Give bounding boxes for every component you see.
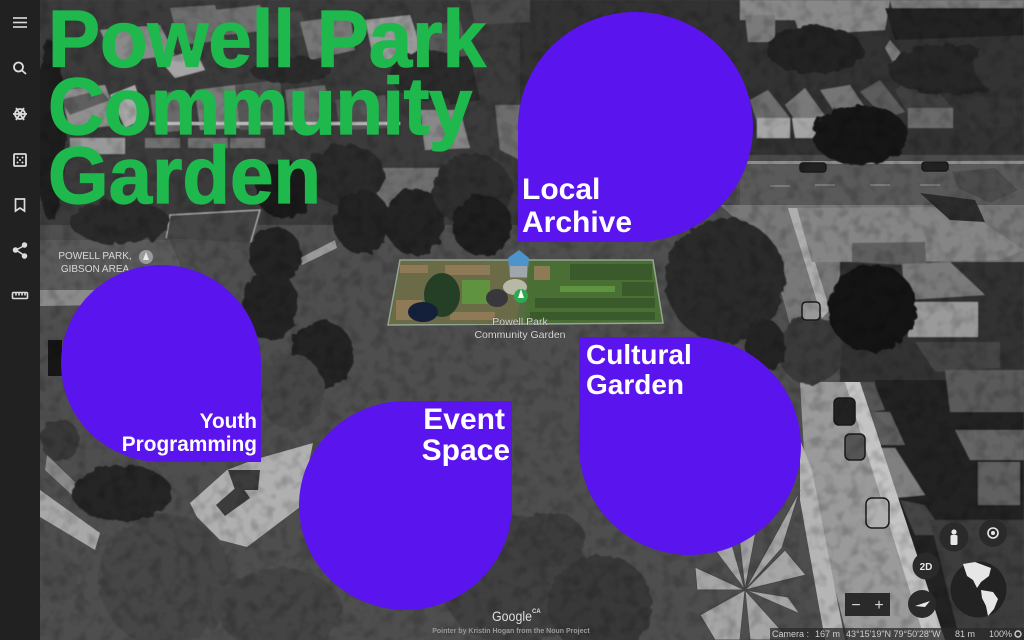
status bar: 81 m: [955, 629, 975, 639]
status bar: [770, 628, 1024, 640]
lower right houses: [840, 242, 1024, 640]
icon: share: [14, 243, 26, 258]
label: local archive: Local: [522, 173, 600, 206]
playground: [190, 443, 313, 547]
garden plot: [388, 250, 663, 325]
label: local archive: [522, 173, 632, 239]
park lawn: [40, 232, 835, 640]
icon: menu: [13, 18, 27, 27]
sidebar: [0, 0, 40, 640]
panel: local archive: [518, 12, 753, 242]
icon: search: [14, 62, 26, 74]
park map label: POWELL PARK,: [58, 251, 132, 262]
street view button: [940, 522, 968, 552]
label: event space: Event: [423, 403, 505, 436]
top right houses: [740, 0, 890, 35]
zoom control: [845, 593, 890, 616]
attribution: Pointer by Kristin Hogan from the Noun Project: [432, 628, 590, 635]
left paths: [40, 290, 110, 306]
apron and curb: [720, 205, 1024, 325]
2D button: [912, 552, 940, 580]
garden map label: Powell Park: [492, 316, 548, 328]
icon: dice: [14, 154, 26, 166]
Google logo: CA: [532, 609, 541, 615]
icon: bookmark: [16, 199, 24, 211]
label: cultural garden: Garden: [586, 369, 684, 400]
cars: [800, 162, 948, 528]
status bar: Camera :: [772, 629, 809, 639]
park map label: GIBSON AREA: [61, 264, 130, 275]
panel: youth programming: [61, 265, 261, 462]
zoom control: +: [874, 597, 884, 614]
garden tree: [424, 273, 460, 317]
houses block top: [40, 0, 1024, 245]
label: youth programming: [122, 410, 257, 456]
status bar: 43°15'19"N 79°50'28"W: [846, 629, 941, 639]
park map pin: [139, 250, 153, 264]
2D button: 2D: [920, 562, 932, 573]
label: local archive: Archive: [522, 206, 632, 239]
title: Community: [48, 61, 472, 152]
blue shed: [508, 250, 529, 278]
panel: cultural garden: [579, 337, 801, 555]
label: cultural garden: Cultural: [586, 339, 692, 370]
side street and sidewalk: [800, 382, 930, 640]
label: event space: [422, 403, 510, 467]
label: event space: Space: [422, 434, 510, 467]
Google logo: Google: [492, 608, 532, 624]
status bar: 167 m: [815, 629, 840, 639]
street horizontal: [740, 160, 1024, 205]
garden map label: Community Garden: [474, 329, 566, 341]
label: youth programming: Youth: [200, 410, 257, 433]
globe: [950, 562, 1006, 618]
panel: event space: [299, 401, 512, 610]
map pin: [514, 289, 528, 303]
pinwheel sculpture: [695, 490, 806, 640]
zoom control: −: [851, 597, 861, 614]
title: [48, 0, 487, 220]
title: Garden: [48, 129, 321, 220]
label: youth programming: Programming: [122, 433, 257, 456]
locate button: [979, 519, 1007, 547]
garden map label: [474, 316, 566, 341]
park map label: [58, 251, 132, 275]
vacant lot: [797, 207, 1024, 262]
status bar: 100%: [989, 629, 1012, 639]
icon: ruler: [12, 292, 28, 298]
label: cultural garden: [586, 339, 692, 400]
icon: ship wheel: [13, 108, 27, 120]
compass button: [908, 590, 936, 618]
